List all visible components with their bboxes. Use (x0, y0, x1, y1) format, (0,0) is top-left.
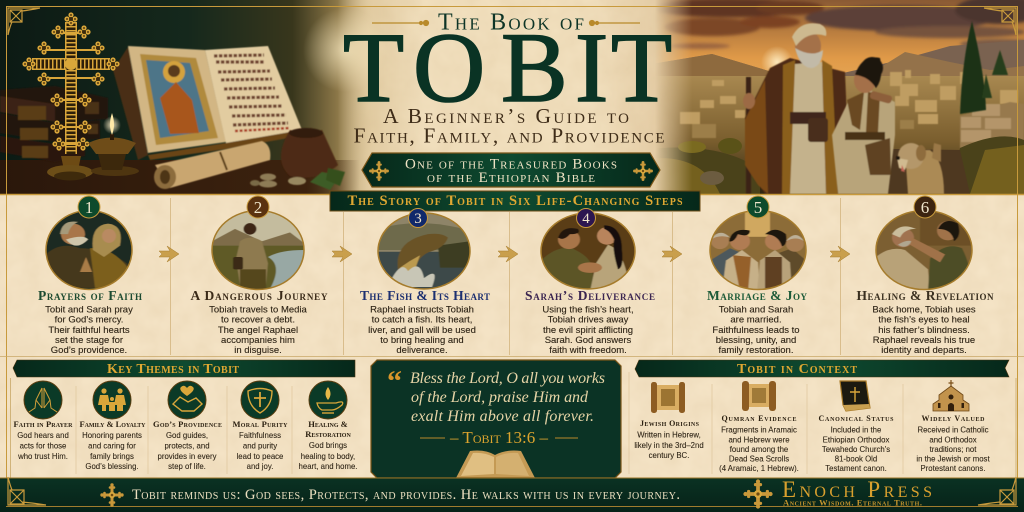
arrow 5 (830, 246, 850, 262)
arrow 2 (332, 246, 352, 262)
theme: faith in prayer: acts for those (20, 442, 66, 451)
city blocks (680, 70, 1018, 138)
icon: footer cross (100, 483, 124, 507)
theme: family and loyalty: Honoring parents (82, 431, 142, 440)
step 6: healing and revelation: Back home, Tobiah uses (872, 304, 976, 316)
icon: praying hands (29, 388, 57, 412)
step 2: a dangerous journey: A Dangerous Journey (190, 288, 328, 303)
context: qumran evidence: (4 Aramaic, 1 Hebrew). (719, 464, 799, 473)
context: widely valued: in the Jewish or most (916, 454, 990, 463)
plaque: treasured books: of the Ethiopian Bible (427, 170, 595, 186)
theme: moral purity: Moral Purity (232, 419, 288, 429)
quote text: of the Lord, praise Him and (411, 389, 589, 406)
number badge 3 (408, 208, 428, 228)
step 4: sarah's deliverance: faith with freedom. (549, 345, 627, 356)
theme: family and loyalty: family brings (90, 452, 134, 461)
theme: healing and restoration: healing to body, (301, 452, 355, 461)
step 6: healing and revelation (856, 196, 994, 356)
context: qumran evidence: Qumran Evidence (722, 414, 796, 423)
context: qumran evidence: found among the (730, 445, 788, 454)
panel: scripture quote (371, 360, 621, 478)
step 3: the fish and its heart: liver, and gall will be used (368, 325, 476, 336)
context: canonical status: Tewahedo Church’s (822, 445, 890, 454)
icon: stacked books (0, 86, 108, 162)
theme: moral purity: Faithfulness (239, 431, 281, 440)
key themes banner: Key Themes in Tobit (107, 362, 239, 377)
theme: family and loyalty: God’s blessing. (85, 462, 139, 471)
theme: faith in prayer: God hears and (17, 431, 69, 440)
theme: god's providence: God guides, (166, 431, 208, 440)
context: jewish origins: likely in the 3rd–2nd (634, 441, 704, 450)
context: canonical status: Included in the (831, 426, 881, 435)
step 2: a dangerous journey: in disguise. (234, 345, 282, 356)
step 3: the fish and its heart: Raphael instructs Tobiah (370, 304, 474, 316)
theme: faith in prayer: who trust Him. (17, 452, 68, 461)
theme: healing and restoration (299, 381, 357, 471)
context: widely valued (916, 380, 990, 473)
step 3: the fish and its heart (360, 206, 490, 356)
context: jewish origins: century BC. (649, 451, 689, 460)
panel: tobit in context (634, 360, 1009, 473)
step 5: marriage and joy: Faithfulness leads to (712, 325, 800, 336)
step 2: a dangerous journey: Tobiah travels to Media (209, 304, 308, 316)
icon: rolled scroll (154, 141, 270, 189)
number badge 5 (747, 196, 769, 218)
step 5: marriage and joy: Tobiah and Sarah (719, 304, 793, 316)
header centre parchment (330, 0, 705, 194)
theme: moral purity (232, 381, 288, 471)
context: widely valued: Protestant canons. (920, 464, 986, 473)
context: qumran evidence: Dead Sea Scrolls (729, 454, 789, 463)
dog (896, 143, 944, 194)
heading ornaments (372, 20, 640, 26)
theme: family and loyalty (80, 381, 146, 471)
number badge 1 (78, 196, 100, 218)
arrow 1 (159, 246, 179, 262)
publisher name: Enoch Press (782, 477, 932, 502)
number badge 2 (247, 196, 269, 218)
step 4: sarah's deliverance: Using the fish’s heart, (542, 304, 634, 316)
step 2: a dangerous journey: to recover a debt. (221, 315, 295, 326)
publisher tagline: Ancient Wisdom. Eternal Truth. (783, 498, 922, 508)
illustration 4 (542, 214, 634, 288)
step 5: marriage and joy: Marriage & Joy (707, 288, 808, 303)
step 4: sarah's deliverance (525, 206, 655, 356)
step 5: marriage and joy: are married. (730, 315, 782, 326)
step 2: a dangerous journey (190, 196, 328, 356)
theme: god's providence (153, 381, 222, 471)
step 6: healing and revelation: Healing & Revelation (856, 288, 994, 303)
theme: healing and restoration: heart, and home. (299, 462, 357, 471)
context: widely valued: Received in Catholic (917, 426, 989, 435)
right landscape scene with father, son and dog (640, 0, 1024, 194)
quote text: exalt Him above all forever. (411, 408, 594, 425)
subtitle (354, 104, 664, 148)
arrow 4 (662, 246, 682, 262)
theme: god's providence: God’s Providence (153, 419, 222, 429)
number badge 1: 1 (85, 198, 93, 217)
number badge 2: 2 (254, 198, 262, 217)
panel: key themes (13, 360, 357, 471)
son figure (832, 57, 895, 194)
icon: oil lamp (88, 113, 139, 176)
step 3: the fish and its heart: deliverance. (396, 345, 448, 356)
step 5: marriage and joy: family restoration. (719, 345, 793, 356)
theme: family and loyalty: Family & Loyalty (80, 419, 146, 429)
context: jewish origins: Jewish Origins (640, 419, 700, 428)
icon: ornate gold cross (22, 12, 120, 181)
subtitle: A Beginner’s Guide to (383, 104, 629, 128)
step 2: a dangerous journey: The angel Raphael (218, 325, 298, 336)
icon: open book (456, 450, 535, 478)
icon: shield with cross (248, 388, 272, 413)
quote mark: “ (387, 365, 402, 398)
plaque: treasured books (362, 153, 660, 187)
step 3: the fish and its heart: to bring healing and (380, 335, 464, 346)
theme: god's providence: protects, and (164, 442, 210, 451)
step 5: marriage and joy: blessing, unity, and (716, 335, 796, 346)
step 4: sarah's deliverance: Sarah. God answers (545, 335, 632, 346)
context: canonical status: Canonical Status (818, 414, 894, 423)
illustration 3 (378, 214, 470, 288)
theme: healing and restoration: Healing & (308, 419, 348, 429)
quote text: Bless the Lord, O all you works (410, 370, 605, 387)
step 3: the fish and its heart: The Fish & Its Heart (360, 288, 490, 303)
theme: faith in prayer (14, 381, 73, 461)
context banner (635, 360, 1009, 377)
theme: moral purity: lead to peace (237, 452, 283, 461)
step 1: prayers of faith (38, 196, 142, 356)
theme: faith in prayer: Faith in Prayer (14, 419, 73, 429)
number badge 4: 4 (582, 211, 590, 227)
context: widely valued: traditions; not (930, 445, 977, 454)
context: canonical status: Ethiopian Orthodox (823, 435, 889, 444)
number badge 3: 3 (414, 211, 422, 227)
arrow 3 (498, 246, 518, 262)
step 5: marriage and joy (707, 196, 808, 356)
story banner: The Story of Tobit in Six Life-Changing Steps (348, 193, 683, 209)
context: qumran evidence: Fragments in Aramaic (721, 426, 797, 435)
step 1: prayers of faith: set the stage for (55, 335, 123, 346)
icon: heart and handshake (173, 386, 202, 411)
icon: black book with cross (840, 381, 870, 411)
context: jewish origins: Written in Hebrew, (637, 430, 701, 440)
icon: scroll (651, 382, 685, 413)
left still-life scene (0, 0, 387, 194)
theme: moral purity: and purity (243, 442, 277, 451)
context: widely valued: and Orthodox (929, 435, 977, 444)
step 1: prayers of faith: Prayers of Faith (38, 288, 142, 303)
cypress trees (960, 21, 1008, 114)
icon: publisher cross (743, 479, 773, 509)
context: qumran evidence (719, 381, 799, 473)
context: widely valued: Widely Valued (922, 414, 985, 423)
step 1: prayers of faith: Their faithful hearts (48, 325, 130, 336)
context: jewish origins (634, 382, 704, 460)
step 1: prayers of faith: for God’s mercy. (55, 315, 123, 326)
illustration 6 (876, 212, 972, 289)
lower panel rule (0, 356, 1024, 478)
illustration 1 (46, 212, 132, 289)
title: The Book of: The Book of (438, 10, 584, 36)
icon: pouch and coins (250, 128, 345, 190)
icon: church (933, 380, 969, 411)
key themes banner (13, 360, 355, 377)
father figure (743, 23, 850, 194)
title: Tobit: TOBIT (343, 12, 672, 123)
quote citation: – Tobit 13:6 – (449, 428, 548, 447)
icon: open illuminated book (113, 46, 302, 160)
theme: family and loyalty: and caring for (88, 442, 136, 451)
footer message: Tobit reminds us: God sees, Protects, and provides. He walks with us in every journey. (132, 487, 680, 503)
step 4: sarah's deliverance: Sarah’s Deliverance (525, 288, 655, 303)
step 3: the fish and its heart: to catch a fish. Its heart, (372, 315, 472, 326)
step 4: sarah's deliverance: Tobiah drives away (548, 315, 629, 326)
clouds (650, 0, 1024, 49)
theme: god's providence: provides in every (158, 452, 217, 461)
subtitle: Faith, Family, and Providence (354, 124, 664, 148)
quote text (410, 370, 605, 425)
footer bar (0, 477, 1024, 512)
illustration 2 (212, 212, 304, 289)
theme: healing and restoration: Restoration (305, 429, 351, 439)
icon: scroll (742, 381, 776, 411)
context: qumran evidence: and Hebrew were (728, 435, 790, 444)
step 1: prayers of faith: God’s providence. (51, 345, 127, 356)
step 4: sarah's deliverance: the evil spirit afflicting (543, 325, 633, 336)
step dividers (170, 198, 840, 355)
step 6: healing and revelation: Raphael reveals his true (873, 335, 975, 346)
number badge 6: 6 (921, 198, 929, 217)
illustration 5 (710, 212, 806, 289)
step 6: healing and revelation: identity and departs. (881, 345, 967, 356)
bushes and ground (640, 136, 1024, 194)
context: canonical status (818, 381, 894, 473)
number badge 5: 5 (754, 198, 762, 217)
stone wall (960, 102, 1024, 148)
step 6: healing and revelation: the fish’s eyes to heal (878, 315, 970, 326)
icon: family (98, 388, 126, 411)
context banner: Tobit in Context (737, 362, 857, 377)
plaque: treasured books: One of the Treasured Books (405, 156, 617, 172)
theme: god's providence: step of life. (168, 462, 206, 471)
number badge 4 (576, 208, 596, 228)
context: canonical status: 81-book Old (835, 454, 877, 463)
theme: healing and restoration: God brings (309, 441, 347, 450)
ornament lines (420, 437, 578, 439)
theme: moral purity: and joy. (247, 462, 273, 471)
step 6: healing and revelation: his father’s blindness. (878, 325, 970, 336)
icon: lamp (317, 387, 343, 413)
number badge 6 (914, 196, 936, 218)
step 2: a dangerous journey: accompanies him (221, 335, 295, 346)
step 1: prayers of faith: Tobit and Sarah pray (45, 304, 133, 316)
context: canonical status: Testament canon. (825, 464, 887, 473)
